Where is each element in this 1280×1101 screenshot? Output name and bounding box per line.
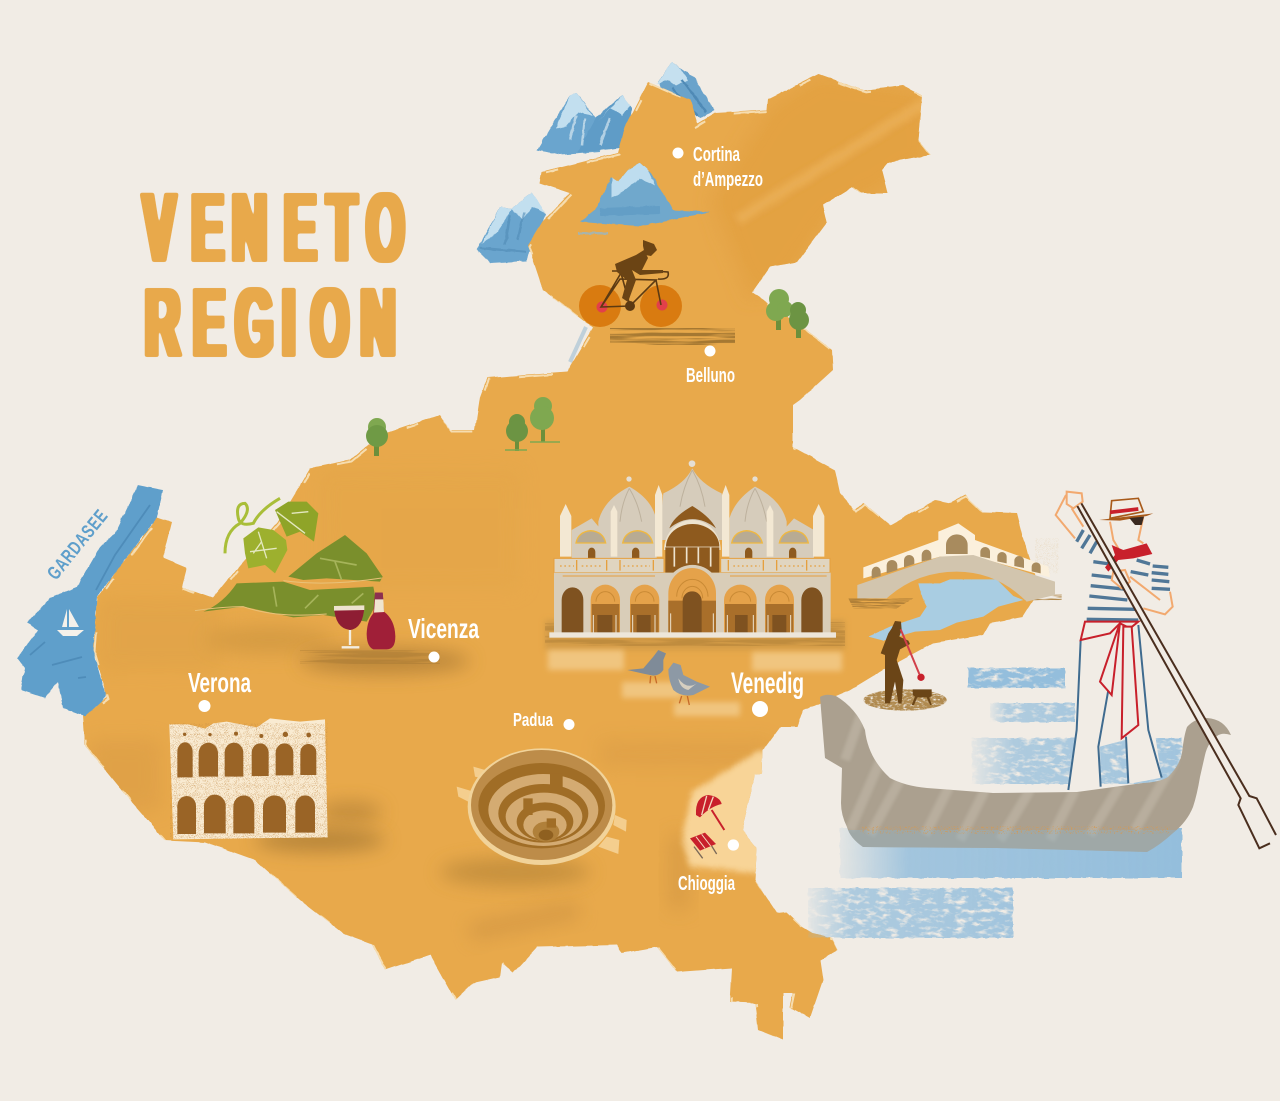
trees: [366, 289, 809, 456]
hat: [1099, 498, 1153, 525]
icon: cyclist: [579, 240, 682, 327]
beach items at Chioggia: [690, 795, 739, 858]
arms and face: [1056, 492, 1173, 614]
ground: [863, 689, 947, 711]
blowpipe: [901, 629, 919, 674]
upper arcade: [863, 523, 1050, 578]
icon: mountain inland: [578, 163, 710, 234]
pigeon right: [668, 663, 710, 705]
icon: gondola: [820, 690, 1231, 855]
trousers: [1068, 625, 1162, 790]
portal interiors: [592, 591, 793, 633]
tabs: [457, 767, 627, 854]
base step: [549, 632, 836, 638]
hull brush texture: [842, 715, 1174, 838]
lower façade: [554, 573, 831, 633]
lake name: GARDASEE: [44, 506, 113, 584]
label: Venedig: [731, 667, 804, 717]
label: Cortina d'Ampezzo: Cortina: [693, 144, 741, 166]
label: Cortina d'Ampezzo: [672, 144, 763, 191]
icon: parasol: [696, 795, 724, 830]
icon: deck chair: [690, 833, 717, 858]
sash: [1081, 622, 1138, 738]
icon: Rialto Bridge: [848, 523, 1062, 641]
pigeon left: [627, 650, 666, 683]
city labels: [188, 144, 804, 895]
icon: Verona arena: [169, 718, 328, 839]
icon: mountains upper left: [537, 93, 632, 155]
oar: [1077, 503, 1276, 848]
body shadow texture: [90, 470, 770, 941]
icon: glassblower: [863, 621, 947, 711]
label: Cortina d'Ampezzo: d’Ampezzo: [693, 169, 763, 191]
turrets: [560, 485, 824, 557]
label: Belluno: [686, 346, 735, 387]
lake shape: [17, 485, 163, 716]
icon: vineyard hills, wine: [195, 498, 395, 649]
frame: [601, 271, 668, 307]
label: Padua: Padua: [513, 710, 554, 730]
mountains behind map edge: [477, 62, 714, 263]
label: Vicenza: [408, 613, 479, 662]
chalk edge lines: [84, 76, 1042, 1042]
icon: tree pair centre: [505, 397, 560, 451]
arch rims: [596, 579, 789, 602]
shadows: [848, 594, 1062, 608]
arcades: [562, 568, 823, 633]
ground shadows: [205, 328, 845, 886]
wheels: [579, 285, 682, 327]
canal water: [868, 579, 1023, 641]
figure: [881, 621, 910, 703]
shirt stripes: [1077, 530, 1170, 620]
leaves and tendril: [225, 498, 318, 573]
icon: sailboat: [57, 609, 84, 636]
wine glass: [334, 605, 364, 647]
hills: [195, 535, 383, 622]
lake: Gardasee: [17, 485, 163, 716]
icon: St Mark's Basilica: [549, 460, 836, 638]
north-east darker texture: [720, 74, 930, 300]
scarf: [1105, 543, 1152, 572]
central arch: [664, 506, 721, 573]
icon: tree pair east: [766, 289, 809, 338]
label: Verona: Verona: [188, 667, 251, 698]
arch span: [857, 555, 1055, 602]
arches: [177, 742, 316, 834]
cyclist water streak: [570, 327, 586, 362]
label: Vicenza: Vicenza: [408, 613, 479, 644]
icon: mountain top: [657, 62, 714, 118]
title: [143, 175, 404, 378]
beach patch: [680, 746, 765, 878]
furnace: [912, 689, 932, 705]
icon: mountains far left: [477, 193, 546, 263]
small windows: [588, 548, 796, 558]
label: Belluno: Belluno: [686, 365, 735, 387]
map of Veneto: [83, 74, 1042, 1042]
title: REGION: [145, 270, 396, 378]
water strips: [808, 668, 1182, 938]
wine bottle: [367, 593, 395, 649]
balustrade: [554, 558, 830, 573]
icon: Padua bowl-shaped garden: [457, 748, 627, 865]
domes: [572, 460, 814, 560]
hull waterline: [848, 830, 1176, 852]
gold half domes: [576, 531, 808, 543]
label: Venedig: Venedig: [731, 667, 804, 700]
icon: pigeons: [627, 650, 710, 705]
label: Chioggia: Chioggia: [678, 873, 736, 895]
icon: tree west: [366, 418, 388, 456]
speckled wall: [1035, 538, 1058, 573]
icon: gondolier: [1056, 492, 1276, 848]
body fill: [1068, 527, 1170, 791]
title: VENETO: [143, 175, 404, 283]
concentric rings: [478, 763, 605, 848]
rider: [615, 250, 663, 302]
label: Verona: [188, 667, 251, 712]
